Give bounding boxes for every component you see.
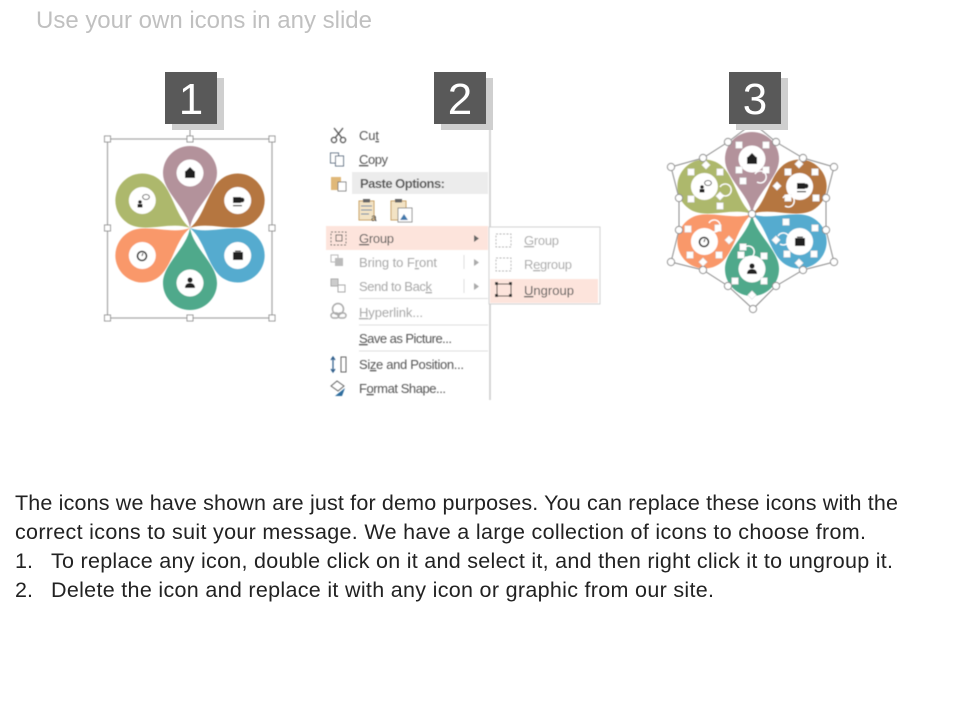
icon: size and position xyxy=(331,357,346,372)
menu labels: Hyperlink... xyxy=(359,305,423,320)
selection frame with handles xyxy=(104,124,275,321)
menu labels xyxy=(359,128,464,396)
submenu panel: Ungroup xyxy=(524,283,574,298)
menu labels: Copy xyxy=(359,152,388,167)
number box 3: 3 xyxy=(743,75,767,124)
icon: person xyxy=(185,277,195,288)
petal icon holes xyxy=(129,160,251,296)
menu labels: Cut xyxy=(359,128,379,143)
icon: calendar xyxy=(233,250,243,260)
icon: hyperlink xyxy=(331,304,346,318)
number box 3 xyxy=(729,72,788,130)
menu labels: Size and Position... xyxy=(359,357,464,372)
menu labels: Paste Options: xyxy=(360,176,445,191)
edit handles on petals xyxy=(685,142,819,299)
icon: scissors xyxy=(331,128,346,143)
icon: person with speech bubble xyxy=(700,180,711,192)
number box 2 xyxy=(434,72,493,130)
icon: coffee cup xyxy=(233,197,244,206)
icon: group xyxy=(331,232,346,245)
instructions text block: Delete the icon and replace it with any icon or graphic from our site. xyxy=(51,578,714,602)
petal icon holes xyxy=(691,146,813,282)
submenu panel: Regroup xyxy=(524,257,572,272)
menu labels: Format Shape... xyxy=(359,381,446,396)
number box 1 xyxy=(165,72,224,130)
flower petals xyxy=(105,146,275,310)
icon: mail xyxy=(747,153,757,164)
menu labels: Group xyxy=(359,231,394,246)
instructions text block: To replace any icon, double click on it and select it, and then right click it to ungroup it. xyxy=(51,549,893,573)
menu right edge xyxy=(489,125,491,400)
menu separators xyxy=(359,255,488,351)
icon: bring to front xyxy=(331,255,343,266)
instructions text block xyxy=(15,491,898,602)
submenu panel: Group xyxy=(524,233,559,248)
icon: copy xyxy=(330,153,344,166)
title: Use your own icons in any slide xyxy=(36,7,372,34)
submenu arrows xyxy=(474,235,479,290)
group highlighted row xyxy=(326,226,488,250)
icon: paste xyxy=(331,177,346,191)
number box 2: 2 xyxy=(448,75,472,124)
icon: paste text xyxy=(359,199,377,224)
paste options bar xyxy=(352,172,488,194)
icon: format shape xyxy=(331,381,345,396)
instructions text block: correct icons to suit your message. We have a large collection of icons to choose from. xyxy=(15,520,866,544)
flower petals xyxy=(667,132,837,296)
menu labels: Save as Picture... xyxy=(359,331,452,346)
instructions text block: The icons we have shown are just for demo purposes. You can replace these icons with the xyxy=(15,491,898,515)
menu labels: Send to Back xyxy=(359,279,432,294)
star selection outline xyxy=(667,123,838,313)
icon: paste text: a xyxy=(371,213,377,224)
icon: person xyxy=(747,263,757,274)
step 2: context menu xyxy=(326,125,600,400)
submenu panel xyxy=(489,227,600,304)
menu labels: Bring to Front xyxy=(359,255,437,270)
instructions text block: 2. xyxy=(15,578,33,602)
icon: paste picture xyxy=(391,199,412,222)
step 3: ungrouped flower graphic xyxy=(667,123,838,313)
icon: gauge xyxy=(700,238,708,246)
icon: person with speech bubble xyxy=(138,194,149,208)
number box 1: 1 xyxy=(179,75,203,124)
step 1: grouped flower graphic xyxy=(104,124,275,321)
icon: calendar xyxy=(795,236,805,246)
icon: mail xyxy=(185,167,195,178)
instructions text block: 1. xyxy=(15,549,33,573)
icon: send to back xyxy=(331,279,345,292)
icon: coffee cup xyxy=(797,183,808,192)
icon: gauge xyxy=(138,252,146,260)
